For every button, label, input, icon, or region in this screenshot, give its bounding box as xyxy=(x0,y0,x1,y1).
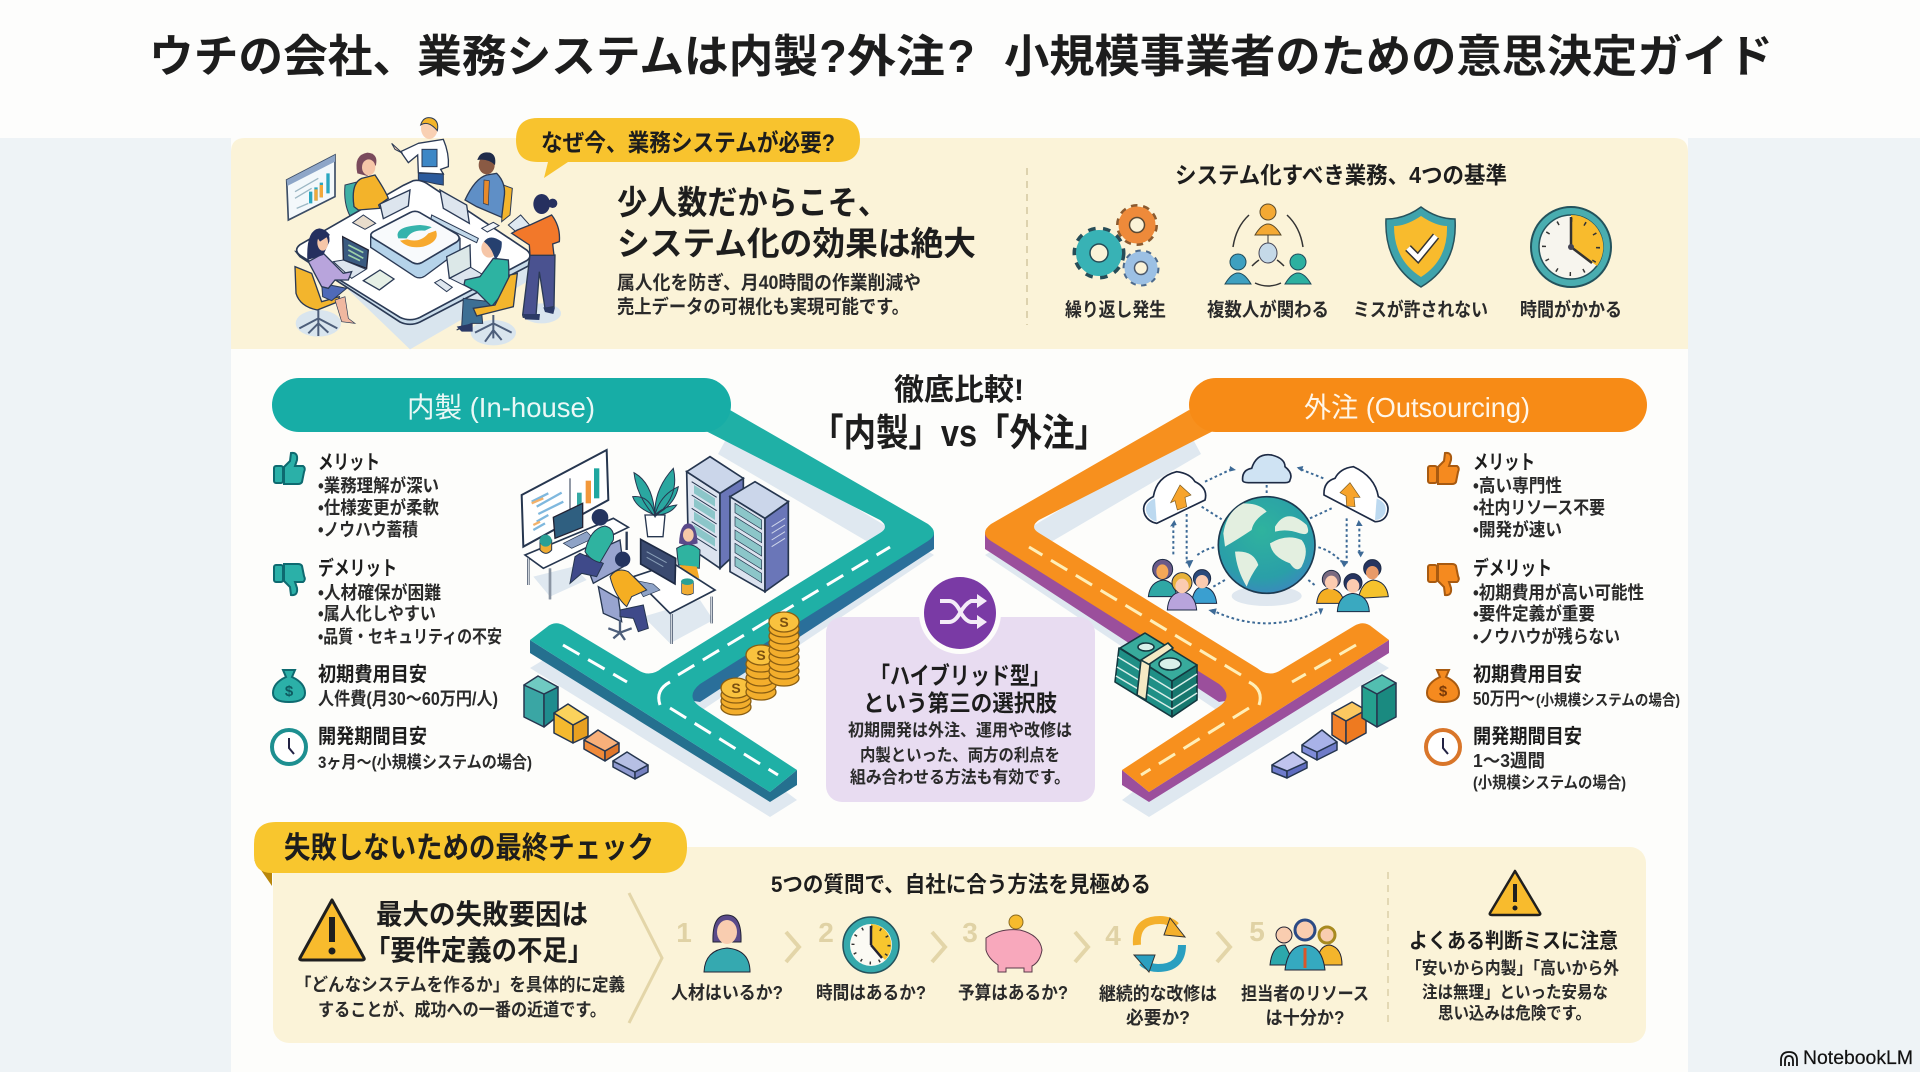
step 5: staff resources: 5 xyxy=(1249,916,1265,947)
panel: hybrid option: 内製といった、両方の利点を xyxy=(860,745,1060,765)
text block: common mistakes xyxy=(1406,930,1619,1023)
column: outsourcing list: •初期費用が高い可能性 xyxy=(1473,582,1644,603)
text block: requirement definition: することが、成功への一番の近道です。 xyxy=(318,999,606,1020)
text block: common mistakes: 注は無理」といった安易な xyxy=(1422,983,1608,1002)
text block: benefits: 売上データの可視化も実現可能です。 xyxy=(617,295,909,318)
step 1: talent: 1 xyxy=(676,917,692,948)
heading: five questions: 5つの質問で、自社に合う方法を見極める xyxy=(771,872,1151,897)
panel: hybrid option: 初期開発は外注、運用や改修は xyxy=(848,720,1072,740)
header pill: in-house: 内製 (In-house) xyxy=(407,392,595,423)
header pill: outsourcing: 外注 (Outsourcing) xyxy=(1304,392,1530,423)
icon: coin stacks: S xyxy=(731,680,741,696)
step 3: budget: 予算はあるか? xyxy=(958,982,1068,1003)
heading: comparison: 徹底比較! xyxy=(894,374,1024,407)
step 5: staff resources: は十分か? xyxy=(1266,1008,1344,1028)
criteria labels: 時間がかかる xyxy=(1520,298,1622,321)
column: outsourcing list: (小規模システムの場合) xyxy=(1536,691,1680,709)
step 5: staff resources xyxy=(1217,916,1369,1028)
column: outsourcing list xyxy=(1426,452,1680,792)
heading: biggest failure cause: 「要件定義の不足」 xyxy=(365,935,593,966)
column: in-house list: メリット xyxy=(318,452,380,474)
step 2: time: 時間はあるか? xyxy=(816,983,926,1003)
icon: money bag: $ xyxy=(1439,683,1448,700)
text block: common mistakes: 「安いから内製」「高いから外 xyxy=(1406,958,1619,978)
banner: final check: 失敗しないための最終チェック xyxy=(284,832,654,865)
icon: coin stacks xyxy=(721,612,799,715)
icon: thumbs up xyxy=(1428,453,1459,484)
column: outsourcing list: •要件定義が重要 xyxy=(1473,603,1595,624)
banner: final check xyxy=(254,822,687,886)
column: outsourcing list: 初期費用目安 xyxy=(1473,663,1582,686)
text block: requirement definition xyxy=(295,975,625,1020)
column: outsourcing list: •高い専門性 xyxy=(1473,476,1562,496)
illustration: outsourcing global network xyxy=(1144,455,1388,623)
text block: common mistakes: よくある判断ミスに注意 xyxy=(1409,930,1618,953)
criteria labels: 複数人が関わる xyxy=(1207,298,1329,321)
column: in-house list xyxy=(272,452,532,772)
title: ウチの会社、業務システムは内製 xyxy=(149,31,818,82)
column: outsourcing list: 1〜3週間 xyxy=(1473,751,1545,771)
heading: biggest failure cause xyxy=(365,899,593,966)
panel: hybrid option: 組み合わせる方法も有効です。 xyxy=(850,767,1070,787)
watermark: NotebookLM: NotebookLM xyxy=(1803,1048,1913,1069)
column: outsourcing list: 開発期間目安 xyxy=(1473,725,1582,748)
step 1: talent: 人材はいるか? xyxy=(671,983,783,1003)
title: ? xyxy=(947,31,975,82)
text block: benefits xyxy=(617,271,921,318)
column: in-house list: •業務理解が深い xyxy=(318,475,439,496)
panel: final check xyxy=(254,822,1646,1043)
icon: thumbs up xyxy=(274,453,305,484)
column: in-house list: 開発期間目安 xyxy=(318,725,427,748)
column: in-house list: •ノウハウ蓄積 xyxy=(318,520,418,540)
icon: gears xyxy=(1076,207,1157,284)
icon: money bag: $ xyxy=(285,683,294,700)
icon: coin stacks: S xyxy=(756,647,766,663)
heading: four criteria: システム化すべき業務、4つの基準 xyxy=(1175,162,1507,188)
column: outsourcing list: •ノウハウが残らない xyxy=(1473,626,1620,647)
column: outsourcing list: 50万円〜 xyxy=(1473,689,1535,709)
illustration: isometric team meeting xyxy=(287,118,561,349)
heading: biggest failure cause: 最大の失敗要因は xyxy=(376,899,588,930)
column: in-house list: •属人化しやすい xyxy=(318,604,436,624)
step 1: talent xyxy=(671,915,783,1003)
title xyxy=(149,31,1773,82)
callout: why now bubble xyxy=(516,118,860,178)
heading: comparison xyxy=(811,374,1107,455)
title: 外注 xyxy=(847,31,945,82)
icon: clock xyxy=(272,730,306,764)
criteria labels: 繰り返し発生 xyxy=(1065,299,1166,321)
text block: benefits: 属人化を防ぎ、月40時間の作業削減や xyxy=(617,271,921,294)
step 3: budget: 3 xyxy=(962,917,978,948)
column: in-house list: •品質・セキュリティの不安 xyxy=(318,627,502,647)
heading: small teams benefit: システム化の効果は絶大 xyxy=(617,225,976,262)
column: outsourcing list: (小規模システムの場合) xyxy=(1473,774,1626,792)
column: in-house list: •仕様変更が柔軟 xyxy=(318,497,439,518)
column: outsourcing list: デメリット xyxy=(1473,556,1552,580)
illustration: in-house office xyxy=(522,450,788,644)
column: in-house list: 3ヶ月〜(小規模システムの場合) xyxy=(318,753,532,772)
column: outsourcing list: •開発が速い xyxy=(1473,519,1562,540)
heading: comparison: 「内製」vs「外注」 xyxy=(811,413,1107,455)
header pill: outsourcing xyxy=(1189,378,1647,432)
icon: thumbs down xyxy=(274,564,305,595)
panel: hybrid option xyxy=(826,572,1095,802)
column: outsourcing list: •社内リソース不要 xyxy=(1473,498,1605,518)
icon: banknote stack xyxy=(1115,633,1197,717)
step 2: time: 2 xyxy=(818,917,834,948)
step 3: budget xyxy=(932,915,1068,1003)
column: in-house list: 初期費用目安 xyxy=(318,663,427,686)
panel: hybrid option: 「ハイブリッド型」 xyxy=(870,662,1050,690)
text block: common mistakes: 思い込みは危険です。 xyxy=(1438,1004,1591,1023)
column: in-house list: デメリット xyxy=(318,556,397,580)
icon: thumbs down xyxy=(1428,564,1459,595)
icon: descending blocks xyxy=(524,676,648,779)
column: in-house list: 人件費(月30〜60万円/人) xyxy=(318,689,498,709)
panel: why system now xyxy=(231,118,1688,349)
icon: shuffle xyxy=(919,572,1001,654)
icon: ascending blocks xyxy=(1272,675,1396,778)
icon: money bag xyxy=(273,670,305,702)
icon: money bag xyxy=(1427,670,1459,702)
column: in-house list: •人材確保が困難 xyxy=(318,582,441,603)
title: 小規模事業者のための意思決定ガイド xyxy=(1004,31,1773,82)
panel: hybrid option: という第三の選択肢 xyxy=(863,690,1057,716)
heading: small teams benefit: 少人数だからこそ、 xyxy=(617,184,888,221)
icon: clock xyxy=(1531,207,1611,287)
criteria labels xyxy=(1065,298,1622,321)
step 4: maintenance: 継続的な改修は xyxy=(1099,983,1217,1004)
step 4: maintenance: 必要か? xyxy=(1126,1008,1190,1028)
heading: small teams benefit xyxy=(617,184,976,262)
icon: clock xyxy=(1426,730,1460,764)
road: in-house path xyxy=(530,410,934,817)
icon: warning triangle small xyxy=(1490,871,1540,915)
icon: warning triangle xyxy=(300,900,364,960)
step 4: maintenance: 4 xyxy=(1105,920,1121,951)
icon: coin stacks: S xyxy=(779,614,789,630)
step 2: time xyxy=(786,917,926,1003)
text block: requirement definition: 「どんなシステムを作るか」を具体的に定義 xyxy=(295,975,625,995)
icon: shield check xyxy=(1386,207,1455,287)
step 5: staff resources: 担当者のリソース xyxy=(1241,983,1369,1004)
column: outsourcing list: メリット xyxy=(1473,452,1535,474)
step 4: maintenance xyxy=(1075,918,1217,1028)
road: outsourcing path xyxy=(985,410,1389,817)
title: ? xyxy=(819,31,847,82)
criteria labels: ミスが許されない xyxy=(1353,298,1488,321)
icon: people network xyxy=(1225,204,1311,286)
header pill: in-house xyxy=(272,378,731,432)
callout: why now bubble: なぜ今、業務システムが必要? xyxy=(541,129,835,157)
